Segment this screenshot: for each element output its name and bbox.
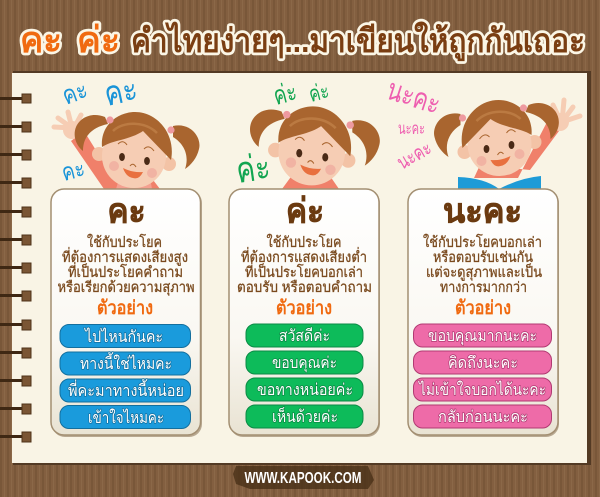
girl 2 doodles: ค่ะ: ค่ะ [306, 78, 332, 107]
description: ที่ต้องการแสดงเสียงสูง [62, 247, 188, 266]
panel: คะ [51, 189, 202, 437]
description: ทางการมากกว่า [440, 280, 527, 296]
example buttons: พี่คะมาทางนี้หน่อย [68, 379, 184, 400]
title: ค่ะ [77, 19, 120, 60]
description: หรือเรียกด้วยความสุภาพ [58, 279, 194, 296]
notebook paper [12, 71, 591, 465]
description [58, 233, 194, 296]
example buttons [60, 324, 190, 428]
heading: นะคะ [443, 192, 522, 230]
example label: ตัวอย่าง [97, 298, 153, 319]
panel: นะคะ [408, 189, 559, 437]
example buttons: ไปไหนกันคะ [83, 327, 163, 346]
footer website badge: WWW.KAPOOK.COM [244, 470, 362, 487]
example buttons: คิดถึงนะคะ [448, 355, 518, 372]
description: หรือตอบรับเช่นกัน [433, 249, 533, 266]
heading: คะ [108, 192, 146, 230]
title: คะ [20, 19, 62, 60]
girl 2 [250, 106, 380, 189]
example buttons: กลับก่อนนะคะ [438, 409, 528, 426]
girl 1 with raised hand [54, 112, 199, 189]
girl 3 doodles: นะคะ [383, 73, 444, 174]
description: ที่เป็นประโยคบอกเล่า [245, 262, 363, 281]
girl 3 doodles: นะคะ: นะคะ [394, 137, 436, 174]
description: ใช้กับประโยค [266, 233, 342, 251]
girl 2 doodles: ค่ะ [233, 76, 332, 191]
spiral rings [0, 94, 31, 442]
title [20, 19, 585, 62]
example buttons: ขอบคุณค่ะ [272, 355, 337, 373]
description: ที่เป็นประโยคคำถาม [68, 262, 183, 281]
example buttons: ขอบคุณมากนะคะ [428, 328, 537, 346]
example buttons: เข้าใจไหมคะ [88, 408, 164, 427]
girl 2 doodles: ค่ะ: ค่ะ [233, 146, 273, 191]
example label: ตัวอย่าง [455, 298, 511, 319]
example buttons: เห็นด้วยค่ะ [272, 406, 338, 426]
girl 1 doodles: คะ: คะ [58, 74, 92, 111]
girl 2 doodles: ค่ะ: ค่ะ [270, 76, 300, 111]
girl 3 doodles: นะคะ: นะคะ [383, 73, 444, 121]
example label: ตัวอย่าง [276, 298, 332, 319]
description: แต่จะดูสุภาพและเป็น [426, 262, 542, 281]
example buttons: สวัสดีค่ะ [279, 327, 330, 345]
example buttons: ไม่เข้าใจบอกได้นะคะ [417, 380, 546, 399]
girl 1 doodles: คะ: คะ [59, 155, 88, 187]
footer website badge [233, 466, 374, 489]
description: ใช้กับประโยคบอกเล่า [423, 233, 542, 251]
description: ใช้กับประโยค [87, 233, 162, 251]
icon: open book [458, 176, 541, 190]
example buttons [414, 324, 552, 428]
girl 1 doodles: คะ: คะ [101, 70, 141, 114]
description: ตอบรับ หรือตอบคำถาม [237, 279, 372, 296]
example buttons [246, 324, 363, 428]
girl 3 doodles: นะคะ: นะคะ [398, 119, 425, 138]
description: ที่ต้องการแสดงเสียงต่ำ [241, 247, 367, 266]
panel: ค่ะ [229, 189, 380, 437]
heading: ค่ะ [286, 192, 324, 230]
girl 3 reading a book [434, 100, 580, 190]
example buttons: ขอทางหน่อยค่ะ [257, 382, 353, 399]
example buttons: ทางนี้ใช่ไหมคะ [80, 352, 172, 373]
description [237, 233, 372, 296]
description [423, 233, 542, 296]
girl 1 doodles: คะ [58, 70, 141, 187]
